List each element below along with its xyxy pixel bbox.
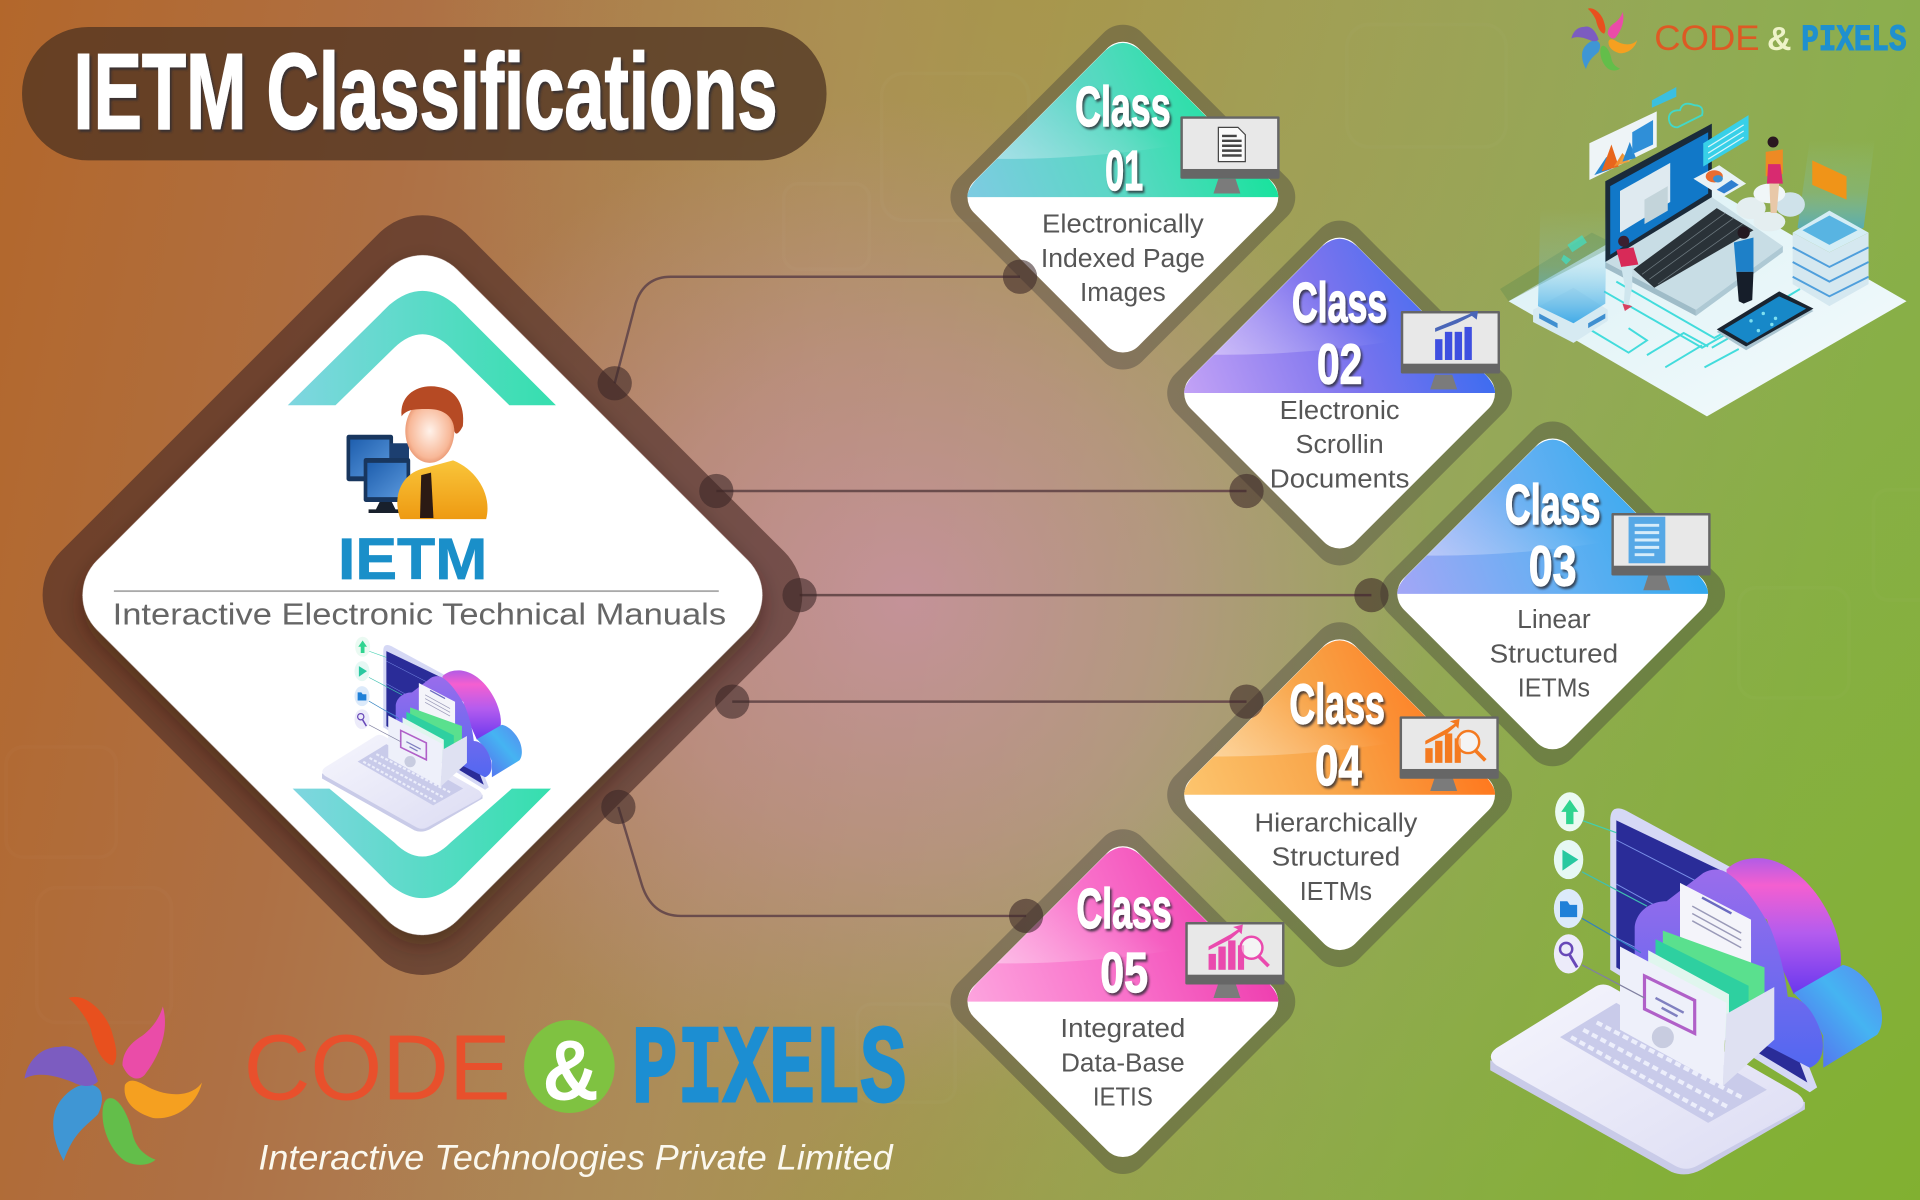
class 05 card xyxy=(950,829,1296,1174)
class 02 card: Documents xyxy=(1270,465,1409,493)
class 05 card: IETIS xyxy=(1093,1084,1153,1112)
class 04 card: Structured xyxy=(1272,844,1400,872)
phone xyxy=(1717,291,1813,350)
figure: girl xyxy=(1616,236,1638,311)
class 04 card xyxy=(1167,622,1512,968)
heading: IETM: IETM xyxy=(338,527,487,592)
cloud small lobe depth xyxy=(1794,965,1882,1068)
logo bottom left xyxy=(24,997,906,1177)
class 02 card: Scrollin xyxy=(1296,431,1384,459)
logo top right: & xyxy=(1767,21,1791,58)
server left xyxy=(1533,208,1608,343)
class 02 card xyxy=(1167,220,1512,566)
class 02 card: 02 xyxy=(1317,332,1362,395)
icon: person at computers xyxy=(347,386,488,519)
class 04 card: Hierarchically xyxy=(1254,809,1417,837)
class 03 card: Linear xyxy=(1517,606,1591,634)
icon: mini cloud laptop xyxy=(322,637,522,832)
class 04 card: Class xyxy=(1289,673,1385,736)
divider line xyxy=(114,590,719,592)
chart card xyxy=(1589,111,1657,180)
logo bottom left: CODE xyxy=(244,1016,511,1120)
server right xyxy=(1793,140,1875,306)
class 01 card: Class xyxy=(1075,75,1171,138)
class 03 card: Class xyxy=(1505,473,1600,536)
class 02 card: Class xyxy=(1292,271,1387,334)
figure: woman on discs xyxy=(1736,137,1805,231)
logo bottom left: PIXELS xyxy=(632,1010,906,1135)
icon: small pinwheel xyxy=(1571,8,1637,70)
class 05 card: Class xyxy=(1076,877,1172,940)
class 01 card: Indexed Page xyxy=(1041,245,1205,273)
class 01 card: 01 xyxy=(1105,139,1143,202)
logo top right: CODE xyxy=(1654,18,1760,58)
illustration: isometric laptop platform xyxy=(1500,87,1907,416)
connector dots xyxy=(598,260,1389,933)
class 03 card: Structured xyxy=(1490,640,1618,668)
figure: man xyxy=(1734,227,1753,304)
logo top right xyxy=(1571,8,1907,70)
connector lines xyxy=(615,277,1371,916)
top teal chevron xyxy=(288,291,556,405)
logo bottom left: Interactive Technologies Private Limited xyxy=(258,1137,894,1177)
cloud depth xyxy=(1727,858,1841,994)
icon: pinwheel xyxy=(24,997,202,1165)
class 05 card: 05 xyxy=(1100,941,1148,1004)
title: IETM Classifications xyxy=(73,31,778,152)
title xyxy=(22,27,827,160)
subheading: Interactive Electronic Technical Manuals: Interactive Electronic Technical Manuals xyxy=(113,597,726,631)
class 01 card: Images xyxy=(1080,279,1166,307)
illustration: cloud file laptop xyxy=(1490,792,1882,1174)
bottom teal chevron xyxy=(293,789,551,898)
class 05 card: Integrated xyxy=(1060,1015,1185,1043)
class 03 card: 03 xyxy=(1529,534,1577,597)
class 01 card: Electronically xyxy=(1042,211,1204,239)
class 04 card: IETMs xyxy=(1300,878,1372,906)
panel: IETM main diamond xyxy=(17,190,828,1000)
class 03 card xyxy=(1380,422,1725,766)
class 01 card xyxy=(950,24,1296,370)
class 03 card: IETMs xyxy=(1518,675,1590,703)
class 04 card: 04 xyxy=(1315,734,1362,797)
logo bottom left: & xyxy=(542,1023,599,1119)
class 05 card: Data-Base xyxy=(1061,1049,1185,1077)
class 02 card: Electronic xyxy=(1280,397,1400,425)
cloud front face xyxy=(1635,870,1823,1068)
